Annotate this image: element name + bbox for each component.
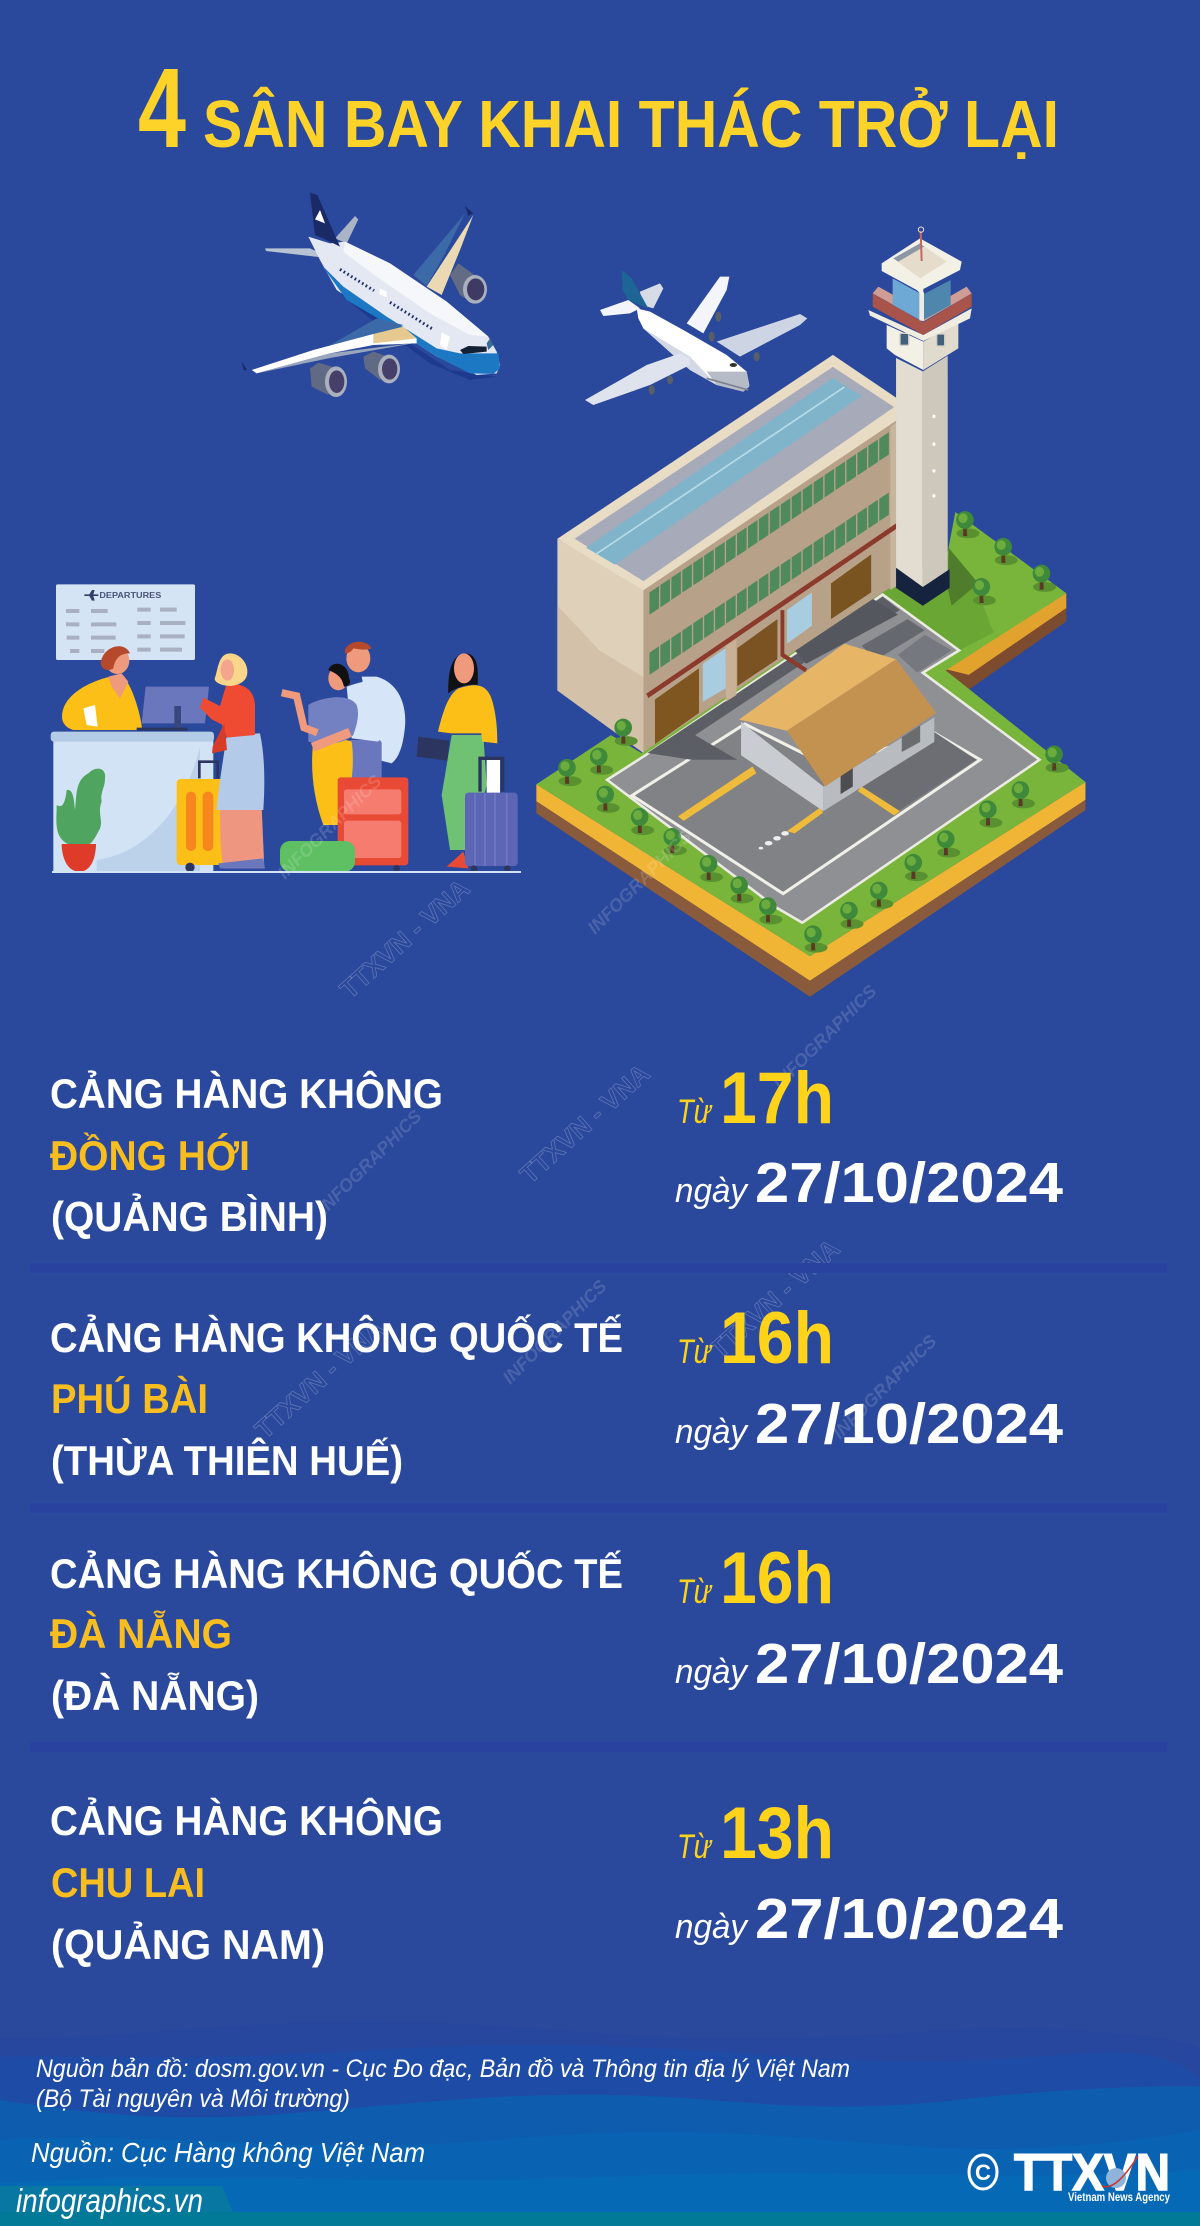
TTXVN logo: C [975,2160,991,2185]
title: 4 [138,45,186,171]
row: Chu Lai: Từ [677,1828,713,1866]
row: Phú Bài [50,1298,1063,1484]
couple [282,642,405,825]
yellow suitcase [177,762,235,872]
watermarks: TTXVN - VNA [334,873,475,1004]
map source note [36,2055,850,2113]
row: Chu Lai: CẢNG HÀNG KHÔNG [50,1796,443,1844]
title: SÂN BAY KHAI THÁC TRỞ LẠI [203,87,1059,162]
monitor [137,687,209,731]
infographics.vn tab [0,2186,233,2212]
blue suitcase [465,793,518,872]
tower shaft [896,356,950,606]
terminal building [557,355,913,753]
row: Đà Nẵng: (ĐÀ NẴNG) [51,1672,259,1719]
watermarks: INFOGRAPHICS [499,1276,610,1388]
row: Đà Nẵng: CẢNG HÀNG KHÔNG QUỐC TẾ [50,1549,623,1597]
plant [56,769,105,872]
woman in yellow [417,653,503,868]
trees [558,511,1069,953]
island sides [536,593,1085,997]
watermarks: INFOGRAPHICS [314,1106,425,1218]
row: Chu Lai: CHU LAI [51,1859,205,1906]
row: Đồng Hới: (QUẢNG BÌNH) [51,1192,328,1240]
row: Phú Bài: 27/10/2024 [755,1392,1063,1456]
map source note: Nguồn bản đồ: dosm.gov.vn - Cục Đo đạc, Bản đồ và Thông tin địa lý Việt Nam [36,2055,850,2083]
watermarks: INFOGRAPHICS [769,981,880,1093]
TTXVN logo: Vietnam News Agency [1068,2192,1171,2204]
row: Chu Lai: (QUẢNG NAM) [51,1920,325,1968]
divider [30,1263,1167,1273]
row: Đồng Hới: 27/10/2024 [755,1151,1063,1215]
row: Chu Lai: ngày [675,1908,749,1946]
row: Phú Bài: 16h [720,1298,834,1379]
watermarks: TTXVN - VNA [704,1233,845,1364]
island grass [536,512,1085,956]
footer waves [0,2022,1200,2226]
asphalt [607,595,1040,923]
watermarks [249,771,940,1444]
row: Phú Bài: Từ [677,1333,713,1371]
row: Đồng Hới [50,1058,1063,1240]
departures board: DEPARTURES [99,591,162,600]
icon: small airplane [585,270,807,405]
red suitcase [338,777,408,872]
control tower head [868,227,972,370]
watermarks: INFOGRAPHICS [584,826,695,938]
data source: Nguồn: Cục Hàng không Việt Nam [31,2137,425,2168]
floor line [52,871,521,873]
green bag [280,841,355,872]
row: Đà Nẵng [50,1538,1063,1719]
illustration: airport island [536,355,1085,997]
row: Phú Bài: (THỪA THIÊN HUẾ) [51,1436,403,1484]
illustration: check-in queue [51,584,521,873]
windows [649,432,889,615]
row: Đồng Hới: ngày [675,1172,749,1210]
departures board [56,584,195,660]
row: Phú Bài: CẢNG HÀNG KHÔNG QUỐC TẾ [50,1313,623,1361]
row: Phú Bài: PHÚ BÀI [51,1374,208,1422]
parking lines [678,766,900,849]
row: Đồng Hới: ĐỒNG HỚI [50,1131,250,1179]
customer in red [200,653,265,868]
icon: large airplane [242,193,500,397]
row: Chu Lai: 13h [720,1793,834,1874]
map source note: (Bộ Tài nguyên và Môi trường) [36,2085,350,2113]
row: Chu Lai [50,1793,1063,1968]
divider [30,1503,1167,1513]
row: Chu Lai: 27/10/2024 [755,1887,1063,1951]
watermarks: TTXVN - VNA [249,1313,390,1444]
watermarks: INFOGRAPHICS [829,1331,940,1443]
watermarks: INFOGRAPHICS [274,771,385,883]
row: Đà Nẵng: Từ [677,1573,713,1611]
row: Đồng Hới: 17h [720,1058,834,1139]
counter [51,732,214,872]
row: Phú Bài: ngày [675,1413,749,1451]
row: Đà Nẵng: 27/10/2024 [755,1632,1063,1696]
site name: infographics.vn [16,2182,203,2219]
row: Đà Nẵng: ngày [675,1653,749,1691]
hangar [739,644,936,811]
footer strip [0,2212,1200,2226]
row: Đồng Hới: Từ [677,1093,713,1131]
row: Đà Nẵng: ĐÀ NẴNG [50,1610,232,1657]
title [138,45,1059,171]
agent [62,646,142,730]
TTXVN logo: TTXVN [1014,2144,1170,2202]
row: Đồng Hới: CẢNG HÀNG KHÔNG [50,1069,443,1117]
divider [30,1742,1167,1752]
watermarks: TTXVN - VNA [514,1058,655,1189]
row: Đà Nẵng: 16h [720,1538,834,1619]
